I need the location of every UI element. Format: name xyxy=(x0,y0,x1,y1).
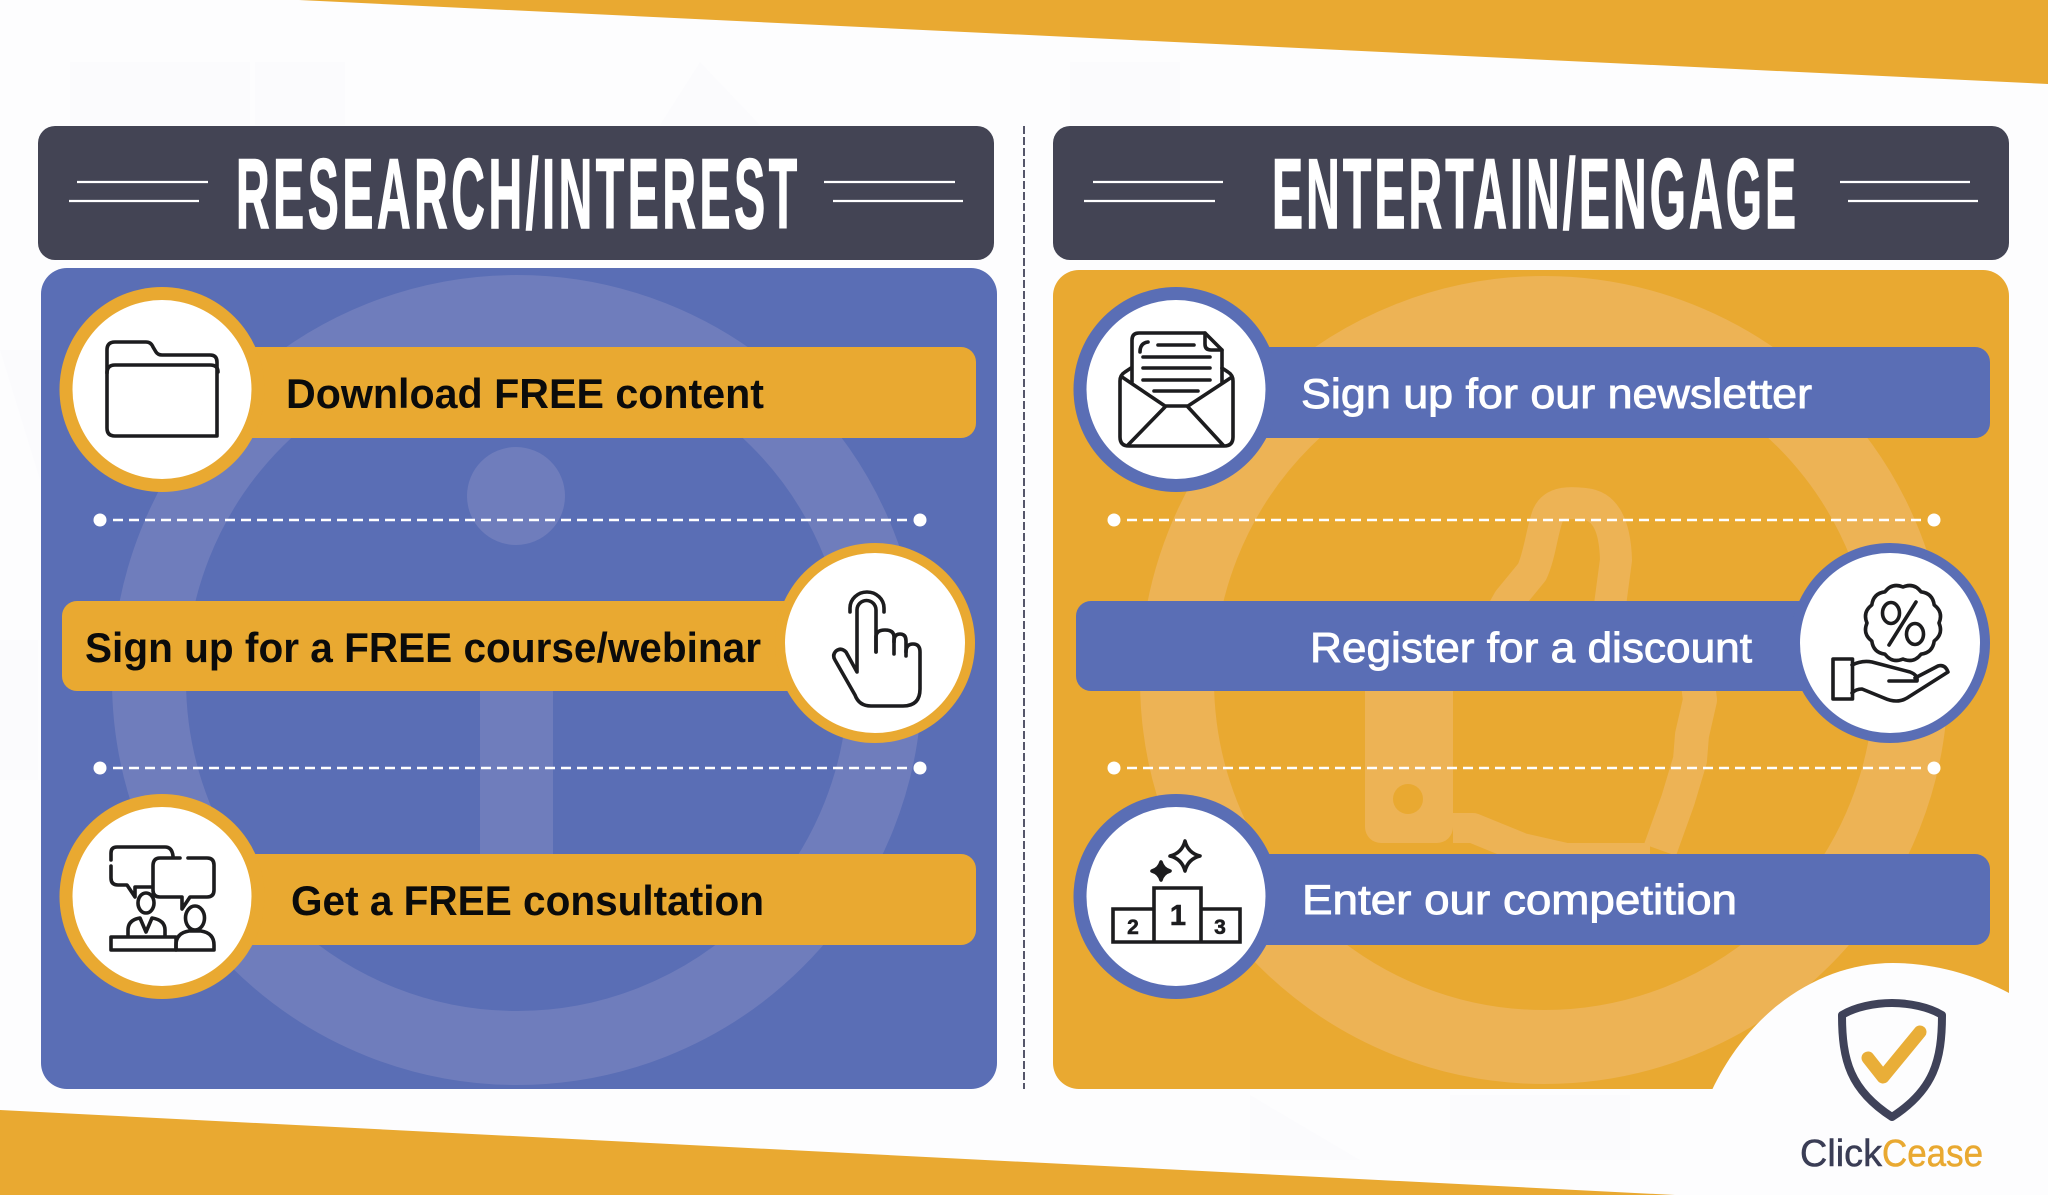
icon: podium: 3 xyxy=(1214,916,1226,939)
heading bar: research interest xyxy=(38,126,994,260)
item: free consultation xyxy=(60,794,976,999)
vertical dashed divider xyxy=(1023,126,1025,1089)
dashed separator four xyxy=(1108,762,1940,774)
item: competition xyxy=(1074,794,1990,999)
item: download free content xyxy=(60,287,976,492)
watermark: info symbol xyxy=(149,312,885,1048)
bottom gold band xyxy=(0,1110,1675,1195)
logo: clickcease xyxy=(1712,963,2012,1175)
heading bar: research interest: RESEARCH/INTEREST xyxy=(236,140,797,250)
item: newsletter: Sign up for our newsletter xyxy=(1301,370,1812,417)
icon: hand with percent badge xyxy=(1833,585,1948,701)
panel: research interest xyxy=(38,126,997,1089)
item: free course webinar: Sign up for a FREE course/webinar xyxy=(85,624,761,671)
heading bar: entertain engage xyxy=(1053,126,2009,260)
heading bar: entertain engage: ENTERTAIN/ENGAGE xyxy=(1272,140,1796,250)
dashed separator one xyxy=(94,514,926,526)
wordmark: Click xyxy=(1800,1133,1883,1175)
icon: podium: 2 xyxy=(1127,916,1139,939)
item: discount xyxy=(1076,543,1990,743)
item: discount: Register for a discount xyxy=(1310,624,1752,671)
icon: envelope with letter xyxy=(1120,333,1233,446)
blue panel background xyxy=(41,268,997,1089)
watermark: thumbs up xyxy=(1177,313,1911,1047)
icon: consultation xyxy=(111,847,214,950)
icon: podium xyxy=(1113,841,1240,942)
item: free consultation: Get a FREE consultation xyxy=(291,877,764,924)
gold panel background xyxy=(1053,270,2009,1089)
dashed separator two xyxy=(94,762,926,774)
dashed separator three xyxy=(1108,514,1940,526)
top gold band xyxy=(299,0,2048,84)
logo: clickcease: Cease xyxy=(1882,1133,1983,1175)
panel: entertain engage xyxy=(1053,126,2009,1089)
item: free course webinar xyxy=(62,543,975,743)
item: newsletter xyxy=(1074,287,1990,492)
item: competition: Enter our competition xyxy=(1302,876,1737,923)
icon: podium: 1 xyxy=(1170,900,1186,932)
item: download free content: Download FREE content xyxy=(286,370,764,417)
icon: folder xyxy=(107,342,218,436)
icon: pointing hand xyxy=(834,592,920,706)
icon: shield with check xyxy=(1842,1003,1942,1117)
